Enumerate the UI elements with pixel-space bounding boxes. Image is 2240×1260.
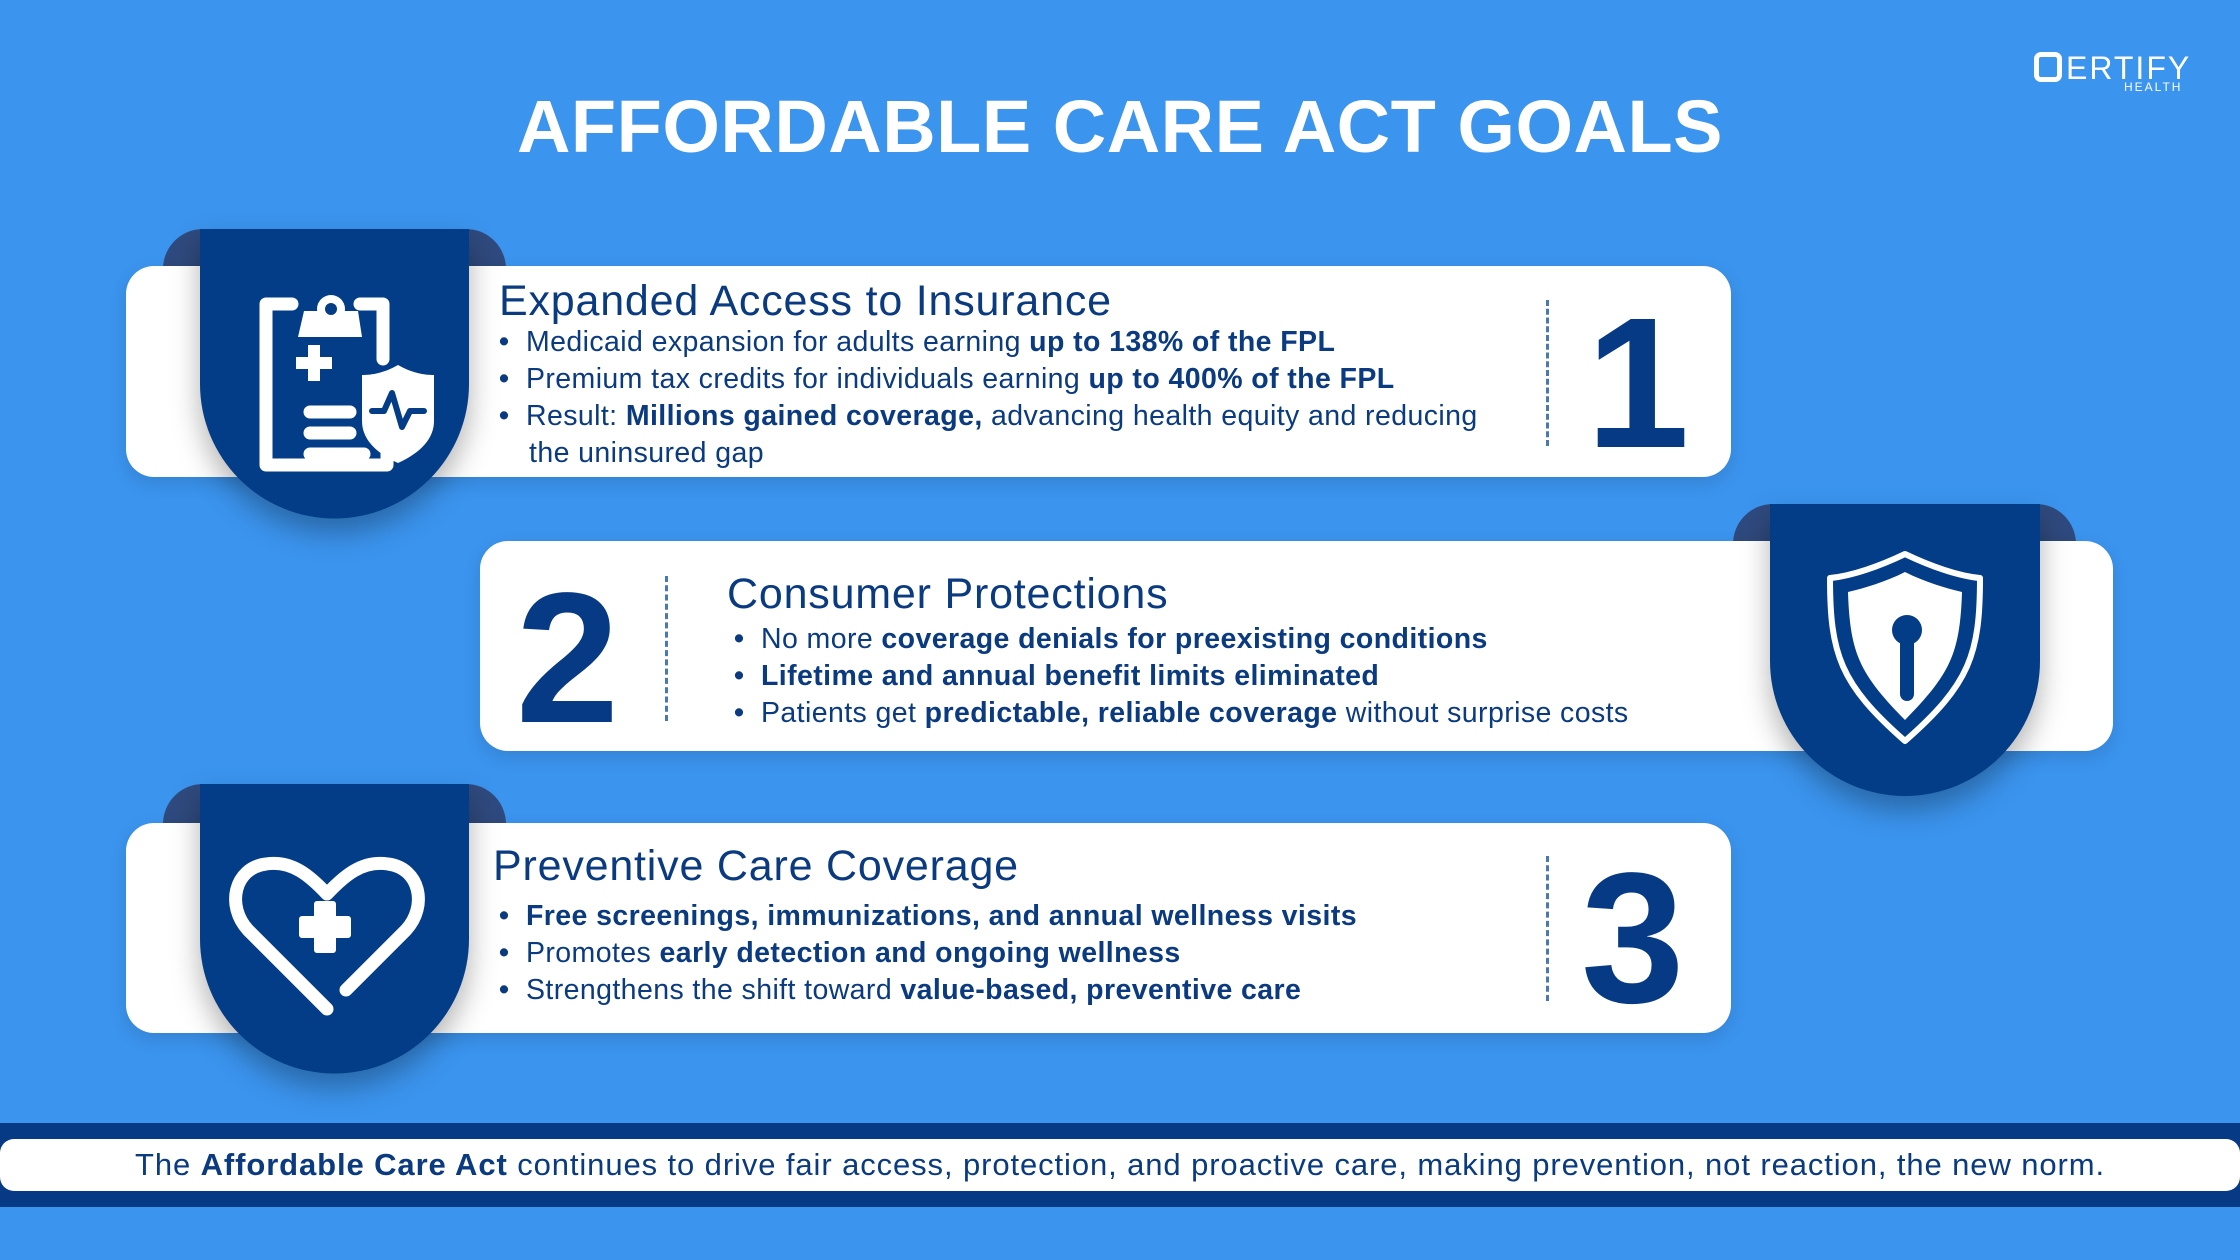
- bullets 1: [500, 326, 1478, 469]
- panel 2: [475, 502, 2118, 826]
- bullets 3: Free screenings, immunizations, and annual wellness visits: [526, 900, 1357, 932]
- bullets 2: Patients get predictable, reliable coverage without surprise costs: [761, 697, 1629, 729]
- number 3: 3: [1581, 835, 1684, 1042]
- footer banner: [0, 1123, 2240, 1207]
- icon shield 1: [184, 226, 486, 548]
- bullets 1: Premium tax credits for individuals earning up to 400% of the FPL: [526, 363, 1395, 395]
- heading 2: Consumer Protections: [727, 570, 1168, 618]
- logo: HEALTH: [2124, 80, 2182, 94]
- panel 1: [121, 226, 1736, 548]
- panel 3: [121, 782, 1736, 1104]
- logo: [2034, 50, 2191, 94]
- heading 3: Preventive Care Coverage: [493, 842, 1019, 890]
- bullets 2: Lifetime and annual benefit limits eliminated: [761, 660, 1379, 692]
- number 2: 2: [516, 555, 619, 762]
- bullets 1: the uninsured gap: [529, 437, 764, 469]
- bullets 1: Medicaid expansion for adults earning up to 138% of the FPL: [526, 326, 1335, 358]
- icon shield 2: [1754, 502, 2056, 826]
- logo: ERTIFY: [2066, 50, 2191, 86]
- bullets 2: No more coverage denials for preexisting conditions: [761, 623, 1488, 655]
- bullets 2: [734, 623, 1629, 729]
- bullets 3: Strengthens the shift toward value-based, preventive care: [526, 974, 1301, 1006]
- icon shield 3: [184, 782, 486, 1104]
- title: AFFORDABLE CARE ACT GOALS: [517, 85, 1723, 168]
- bullets 3: [500, 900, 1357, 1006]
- bullets 3: Promotes early detection and ongoing wellness: [526, 937, 1181, 969]
- footer banner: The Affordable Care Act continues to drive fair access, protection, and proactive care, making prevention, not reaction, the new norm.: [135, 1147, 2105, 1182]
- heading 1: Expanded Access to Insurance: [499, 277, 1112, 325]
- number 1: 1: [1586, 280, 1689, 487]
- bullets 1: Result: Millions gained coverage, advancing health equity and reducing: [526, 400, 1478, 432]
